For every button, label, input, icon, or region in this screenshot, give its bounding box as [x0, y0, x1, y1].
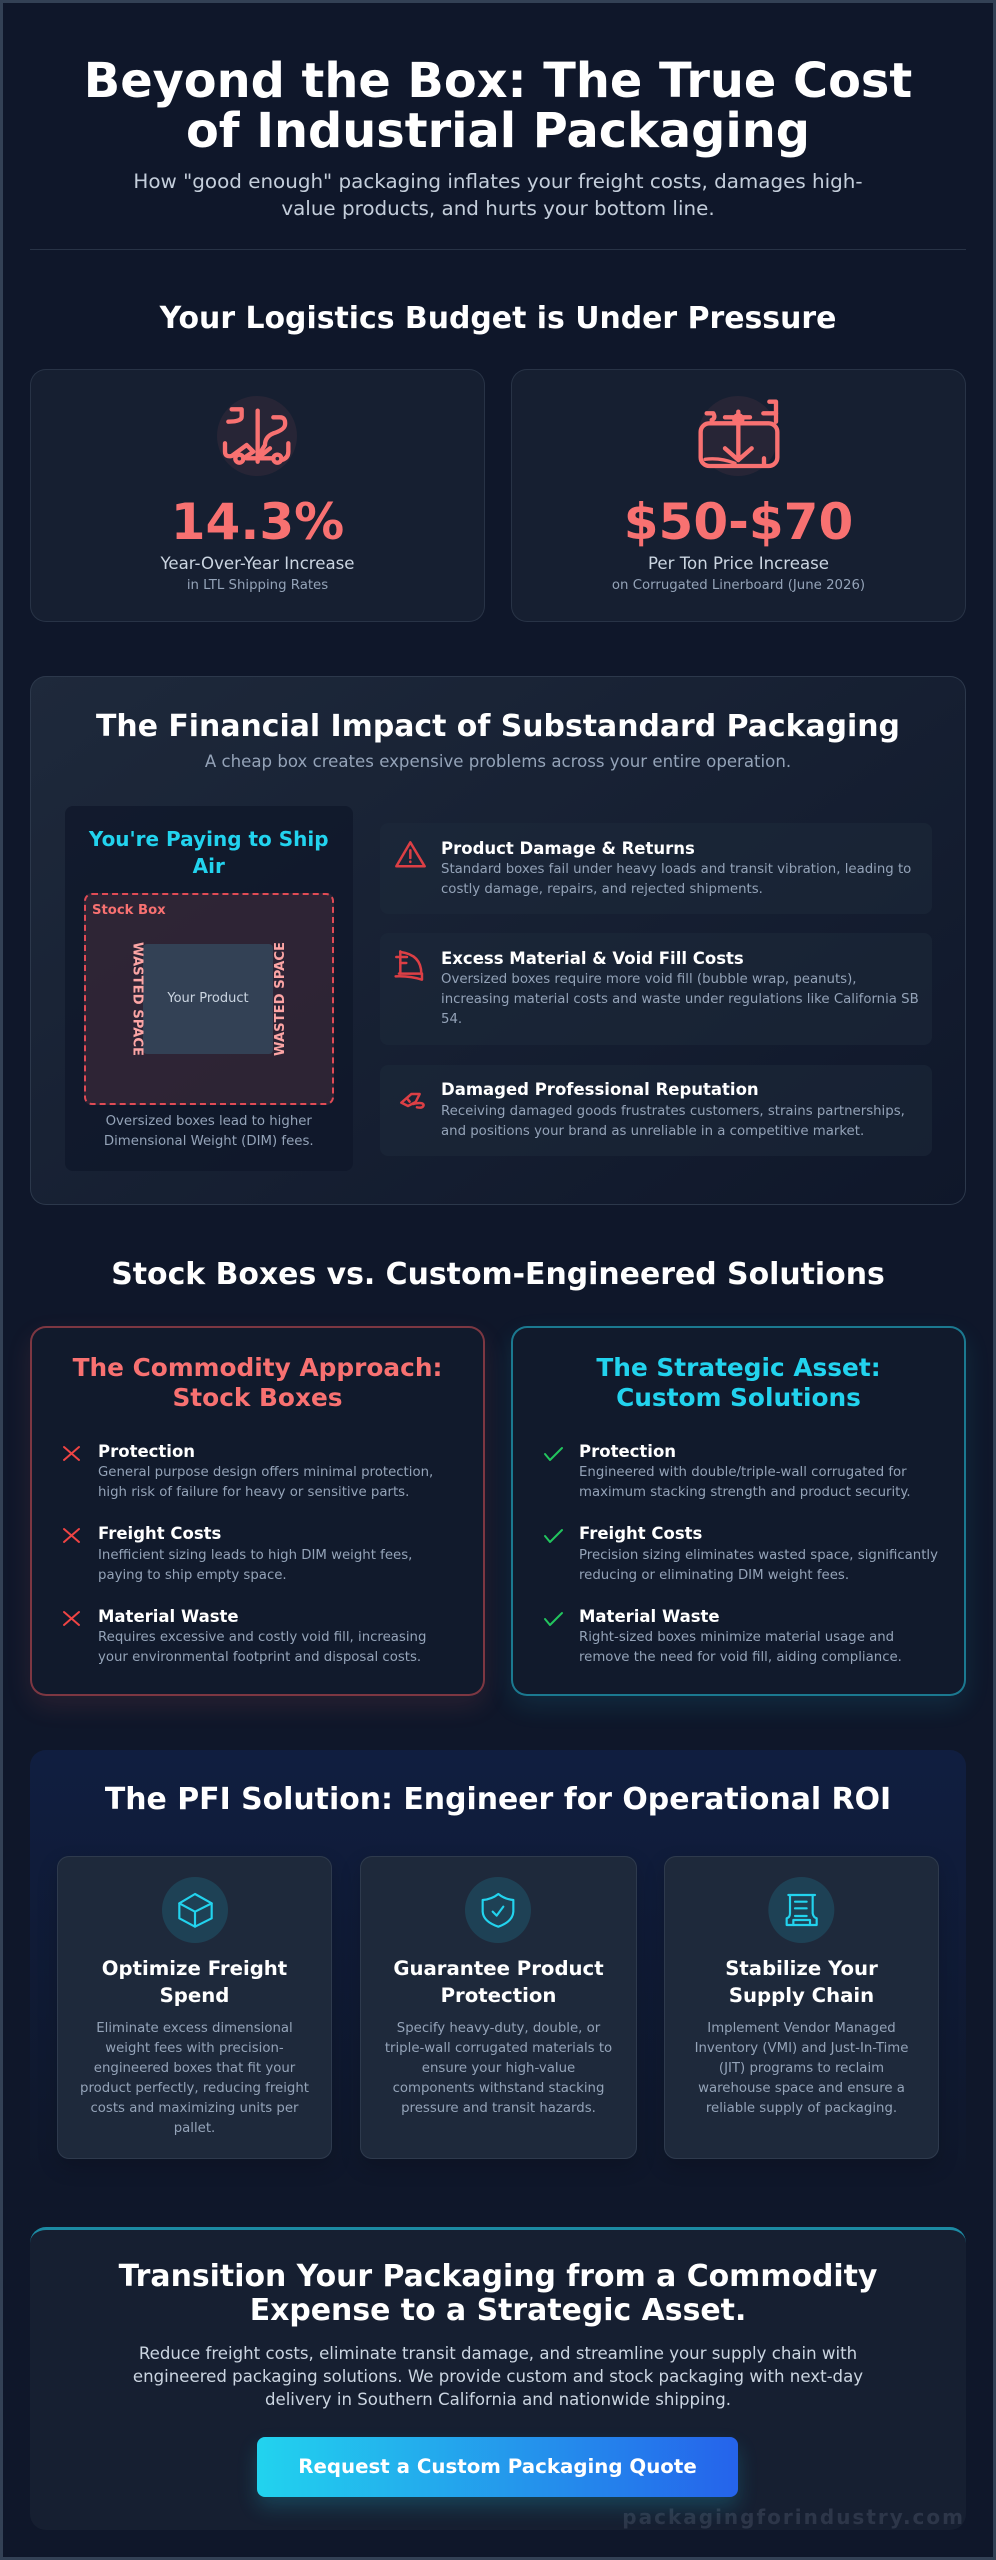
stock box label: Stock Box	[92, 903, 166, 918]
card text	[80, 2021, 309, 2136]
card text: components withstand stacking	[393, 2081, 604, 2096]
row text: remove the need for void fill, aiding compliance.	[579, 1650, 902, 1665]
item title: Excess Material & Void Fill Costs	[441, 949, 744, 968]
diagram heading	[88, 827, 329, 878]
row: material waste	[63, 1607, 426, 1665]
CTA text: Reduce freight costs, eliminate transit damage, and streamline your supply chain with	[139, 2344, 857, 2363]
watermark: packagingforindustry.com	[622, 2505, 965, 2529]
subtitle	[133, 170, 863, 220]
panel: linerboard price stat	[511, 369, 966, 622]
panel: financial impact	[30, 676, 966, 1205]
title	[84, 54, 912, 159]
card title: Protection	[441, 1984, 556, 2007]
card text: Eliminate excess dimensional	[96, 2021, 293, 2036]
card: guarantee protection	[360, 1856, 637, 2159]
panel: strategic asset	[511, 1326, 966, 1696]
row text: paying to ship empty space.	[98, 1568, 287, 1583]
row label: Protection	[98, 1442, 195, 1461]
row text: reducing or eliminating DIM weight fees.	[579, 1568, 849, 1583]
row text: Right-sized boxes minimize material usage and	[579, 1630, 894, 1645]
item title: Product Damage & Returns	[441, 839, 695, 858]
heading: The PFI Solution: Engineer for Operational ROI	[105, 1782, 891, 1817]
card text: costs and maximizing units per	[90, 2101, 299, 2116]
card text: engineered boxes that fit your	[94, 2061, 295, 2076]
card text: Specify heavy-duty, double, or	[397, 2021, 600, 2036]
stat label: Per Ton Price Increase	[648, 554, 829, 573]
row label: Freight Costs	[579, 1524, 702, 1543]
card: optimize freight	[57, 1856, 332, 2159]
card title	[393, 1957, 604, 2007]
item body	[441, 972, 919, 1027]
icon: cross	[63, 1446, 80, 1461]
subtitle: value products, and hurts your bottom line.	[281, 197, 715, 220]
intro text: A cheap box creates expensive problems across your entire operation.	[205, 752, 791, 771]
icon: cross	[63, 1528, 80, 1543]
stat value: 14.3%	[171, 493, 344, 551]
card text: (JIT) programs to reclaim	[719, 2061, 884, 2076]
icon: check	[544, 1447, 563, 1461]
icon: check	[544, 1529, 563, 1543]
panel heading	[596, 1353, 881, 1412]
card text: pallet.	[174, 2121, 215, 2136]
card text	[385, 2021, 612, 2116]
row text	[579, 1465, 911, 1500]
panel: paying to ship air diagram	[64, 806, 353, 1171]
panel: call to action	[30, 2227, 966, 2530]
item body: increasing material costs and waste under regulations like California SB	[441, 992, 919, 1007]
CTA button	[257, 2437, 738, 2497]
row text	[98, 1465, 433, 1500]
item body: costly damage, repairs, and rejected shipments.	[441, 882, 763, 897]
panel heading: The Commodity Approach:	[73, 1353, 442, 1382]
icon: cube	[162, 1877, 228, 1943]
card title	[102, 1957, 287, 2007]
row text: Inefficient sizing leads to high DIM weight fees,	[98, 1548, 412, 1563]
product block: Your Product	[167, 991, 249, 1006]
diagram caption: Oversized boxes lead to higher	[106, 1114, 312, 1129]
row text	[98, 1548, 412, 1583]
stat sublabel: on Corrugated Linerboard (June 2026)	[612, 578, 865, 593]
row text: Engineered with double/triple-wall corrugated for	[579, 1465, 907, 1480]
item body: Receiving damaged goods frustrates customers, strains partnerships,	[441, 1104, 905, 1119]
row label: Material Waste	[98, 1607, 239, 1626]
item title: Damaged Professional Reputation	[441, 1080, 759, 1099]
CTA button: Request a Custom Packaging Quote	[298, 2455, 697, 2478]
item: reputation	[380, 1065, 932, 1156]
row text: Requires excessive and costly void fill, increasing	[98, 1630, 426, 1645]
CTA heading: Transition Your Packaging from a Commodity	[119, 2259, 877, 2294]
card text: Implement Vendor Managed	[707, 2021, 896, 2036]
panel: commodity approach	[30, 1326, 485, 1696]
item body: Standard boxes fail under heavy loads and transit vibration, leading to	[441, 862, 911, 877]
row label: Freight Costs	[98, 1524, 221, 1543]
product block	[143, 944, 273, 1054]
row text	[98, 1630, 426, 1665]
icon: shield	[465, 1877, 531, 1943]
row text: maximum stacking strength and product security.	[579, 1485, 911, 1500]
row: protection	[544, 1442, 911, 1500]
diagram heading: Air	[193, 854, 225, 878]
item body: 54.	[441, 1012, 462, 1027]
CTA heading	[30, 2260, 966, 2328]
icon: material stack	[394, 950, 424, 981]
CTA text	[30, 2342, 966, 2411]
card title: Stabilize Your	[725, 1957, 878, 1980]
icon: broken badge	[400, 1092, 425, 1109]
panel: PFI solution	[30, 1750, 966, 2185]
panel heading: Custom Solutions	[616, 1383, 861, 1412]
card text: pressure and transit hazards.	[401, 2101, 596, 2116]
diagram caption	[104, 1114, 314, 1149]
card text: triple-wall corrugated materials to	[385, 2041, 612, 2056]
CTA heading: Expense to a Strategic Asset.	[250, 2293, 746, 2328]
row: freight costs	[63, 1524, 412, 1583]
icon: check	[544, 1612, 563, 1626]
row text: high risk of failure for heavy or sensitive parts.	[98, 1485, 409, 1500]
item body	[441, 1104, 905, 1139]
row text: your environmental footprint and disposal costs.	[98, 1650, 421, 1665]
icon: warning triangle	[395, 841, 426, 868]
stat sublabel: in LTL Shipping Rates	[187, 578, 328, 593]
panel heading: Stock Boxes	[172, 1383, 343, 1412]
icon: cross	[63, 1611, 80, 1626]
card title: Spend	[160, 1984, 229, 2007]
panel heading	[72, 1353, 442, 1412]
card text: ensure your high-value	[422, 2061, 575, 2076]
subtitle: How "good enough" packaging inflates your freight costs, damages high-	[133, 170, 863, 193]
row label: Material Waste	[579, 1607, 720, 1626]
icon: box with down arrow	[698, 396, 780, 476]
card text	[664, 2019, 939, 2119]
panel heading: The Strategic Asset:	[596, 1353, 881, 1382]
item: product damage	[380, 823, 932, 914]
CTA text: engineered packaging solutions. We provide custom and stock packaging with next-day	[133, 2367, 863, 2386]
row text	[579, 1548, 938, 1583]
card: stabilize supply chain	[664, 1856, 939, 2159]
card text: warehouse space and ensure a	[698, 2081, 905, 2096]
row text	[579, 1630, 902, 1665]
stat label: Year-Over-Year Increase	[160, 554, 355, 573]
row: freight costs	[544, 1524, 938, 1583]
section heading: logistics budget: Your Logistics Budget is Under Pressure	[160, 301, 836, 336]
icon: inventory document	[768, 1877, 834, 1943]
card text: weight fees with precision-	[105, 2041, 284, 2056]
card title: Supply Chain	[729, 1984, 874, 2007]
stock box	[84, 893, 334, 1105]
row: protection	[63, 1442, 433, 1500]
title: of Industrial Packaging	[186, 104, 810, 159]
card title: Optimize Freight	[102, 1957, 287, 1980]
CTA text: delivery in Southern California and nationwide shipping.	[265, 2390, 731, 2409]
item body: and positions your brand as unreliable in a competitive market.	[441, 1124, 864, 1139]
card title	[725, 1957, 878, 2007]
diagram caption: Dimensional Weight (DIM) fees.	[104, 1134, 314, 1149]
item: excess material	[380, 933, 932, 1045]
wasted space label left: WASTED SPACE	[130, 942, 144, 1056]
heading: The Financial Impact of Substandard Packaging	[96, 709, 900, 744]
card text: reliable supply of packaging.	[706, 2101, 897, 2116]
section heading: comparison: Stock Boxes vs. Custom-Engineered Solutions	[111, 1257, 885, 1292]
title: Beyond the Box: The True Cost	[84, 54, 912, 109]
stat value: $50-$70	[624, 493, 853, 551]
item body	[441, 862, 911, 897]
card title: Guarantee Product	[393, 1957, 604, 1980]
row text: General purpose design offers minimal protection,	[98, 1465, 433, 1480]
panel: LTL shipping stat	[30, 369, 485, 622]
item body: Oversized boxes require more void fill (bubble wrap, peanuts),	[441, 972, 857, 987]
wasted space label right: WASTED SPACE	[273, 942, 288, 1056]
diagram heading: You're Paying to Ship	[89, 827, 329, 851]
card text: Inventory (VMI) and Just-In-Time	[695, 2041, 908, 2056]
icon: forklift	[217, 396, 297, 476]
row: material waste	[544, 1607, 902, 1665]
row label: Protection	[579, 1442, 676, 1461]
row text: Precision sizing eliminates wasted space, significantly	[579, 1548, 938, 1563]
card text: product perfectly, reducing freight	[80, 2081, 309, 2096]
